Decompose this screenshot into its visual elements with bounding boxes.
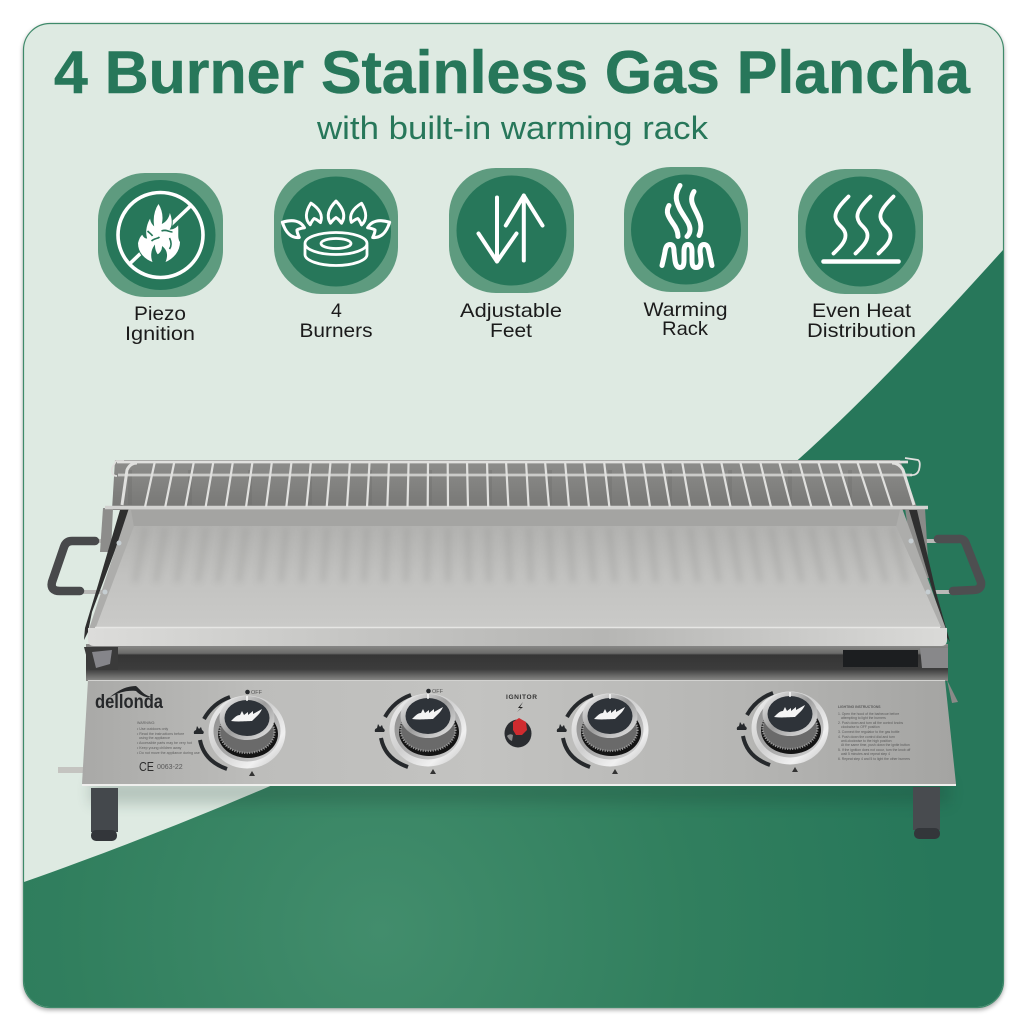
title: 4 Burner Stainless Gas Plancha [54,39,971,106]
ignitor button [504,718,532,748]
lighting instructions text: attempting to light the burners [841,716,886,720]
griddle cooking surface [96,526,941,627]
knob 2 off label: OFF [432,689,444,695]
label: Feet: Feet [490,320,533,342]
left handle [52,541,112,592]
gas plancha product [52,458,981,841]
knob 2 [375,694,466,774]
icon: no flame [98,173,223,297]
panel top edge [88,680,945,682]
left dark side strip [84,510,130,640]
CE mark: CE [139,759,154,774]
knob 2 off label [426,689,444,695]
lighting instructions text: anti-clockwise to the high position [841,739,892,743]
subtitle: with built-in warming rack [316,110,709,146]
feature: 4 burners [274,169,398,342]
knob 3 [557,694,648,774]
knob 1 off label [245,690,263,696]
griddle plate [88,508,947,632]
lighting instructions text: At the same time, push down the ignite button [841,743,910,747]
warning text: • Keep young children away [137,746,182,750]
feature: warming rack [624,167,748,340]
right bracket [920,648,948,668]
left bracket [84,647,118,670]
grill shadow on background [90,780,950,804]
left leg [91,788,118,841]
feature: even heat distribution [798,169,923,342]
label: Even Heat: Even Heat [812,300,912,322]
back plate streaks [130,470,850,505]
feature: piezo ignition [98,173,223,345]
gas inlet fitting [58,767,83,773]
ignition box [843,650,918,667]
warning text: WARNING: [137,721,155,725]
knob 1 [194,696,286,776]
right handle [926,539,981,592]
lighting instructions text: 6. Repeat step 4 and 5 to light the other burners [838,757,910,761]
warning text: using the appliance [139,736,170,740]
green curved background shape [24,250,1003,1007]
label: Warming: Warming [644,299,728,321]
lighting instructions text: 2. Push down and turn all the control knobs [838,721,903,725]
knob 4 [737,692,828,772]
icon: heat over coil [624,167,748,292]
lighting instructions text: wait 5 minutes and repeat step 4 [841,752,890,756]
right side vent [947,680,958,703]
brand logo: dellonda [95,692,163,713]
lighting instructions text: 4. Push down the control dial and turn [838,735,895,739]
griddle front lip [88,628,947,646]
front control panel [82,680,956,784]
lighting instructions text: 1. Open the hood of the barbecue before [838,712,899,716]
warming rack [105,458,928,508]
lighting instructions text: 5. If the ignition does not occur, turn the knob off [838,748,910,752]
back plate [112,460,918,510]
panel bottom edge [82,784,956,786]
icon: gas burner [274,169,398,294]
label: Adjustable: Adjustable [460,300,562,322]
CE mark: 0063-22 [157,764,183,771]
burner body band [86,644,948,681]
lighting instructions text: 3. Connect the regulator to the gas bottle [838,730,900,734]
right dark side strip [909,510,950,642]
icon: spark [517,702,523,712]
right leg [913,787,940,839]
right strut [905,508,929,578]
warning text: • Use outdoors only [137,727,168,731]
griddle side bolts [102,538,930,594]
feature: adjustable feet [449,168,574,342]
icon: up and down arrows [449,168,574,293]
left strut [100,508,113,552]
label: Burners: Burners [300,320,373,342]
label: Ignition: Ignition [125,323,195,345]
warning text: • Do not move the appliance during use [137,751,200,755]
label: 4: 4 [331,300,342,322]
CE mark [139,759,183,774]
label: Piezo: Piezo [134,303,186,325]
lighting instructions text: clockwise to OFF position [841,725,880,729]
griddle back band [131,510,900,527]
griddle streaks [134,552,906,579]
griddle lip top edge [95,626,940,628]
lighting instructions text: LIGHTING INSTRUCTIONS [838,705,881,709]
warning text: • Accessible parts may be very hot [137,741,192,745]
knob 1 off label: OFF [251,690,263,696]
warning text: • Read the instructions before [137,732,184,736]
icon: heat waves over line [798,169,923,294]
ignitor label: IGNITOR [506,694,537,701]
label: Distribution: Distribution [807,320,916,342]
left bracket detail [92,650,112,668]
label: Rack: Rack [662,318,708,340]
